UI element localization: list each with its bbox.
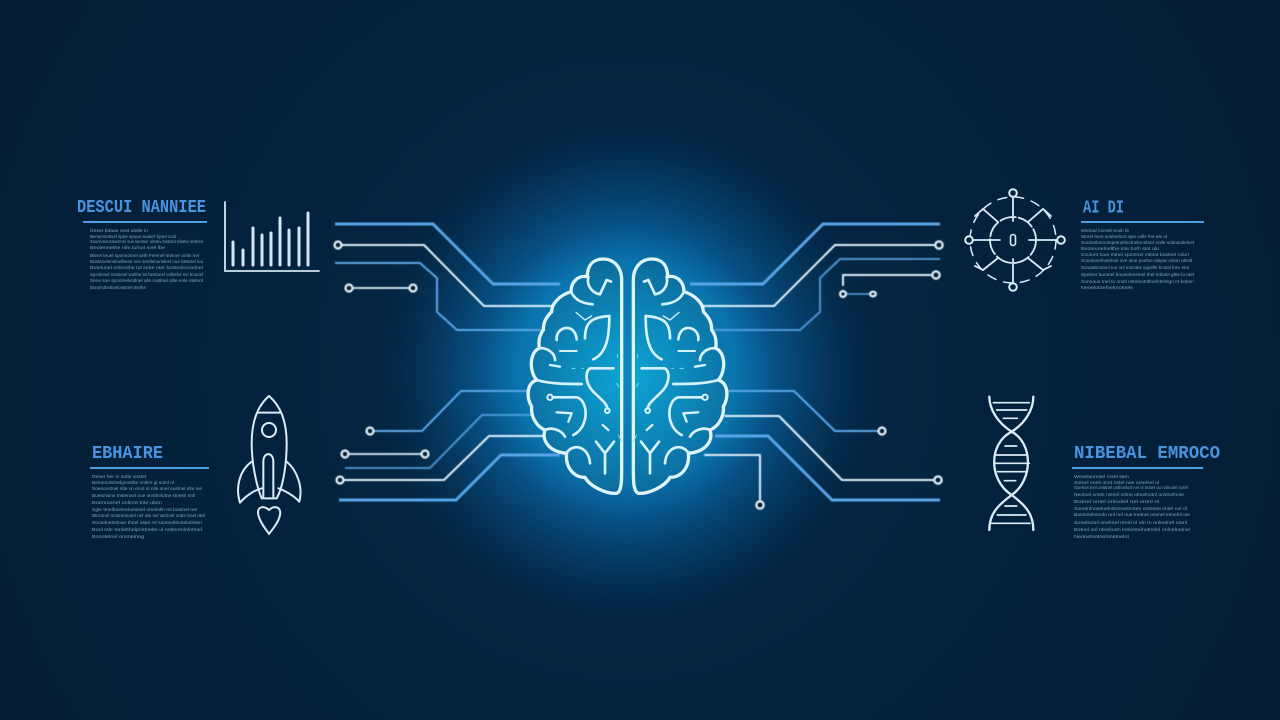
body text (1074, 474, 1190, 539)
body text: Bonl ntle tonlelthelpnstnelte ul nstlnotnlnlntlnel (92, 527, 202, 532)
divider rule (1081, 221, 1204, 223)
body text: Bitnel teuel sponnotnel with Frevnel stelner onlin nel (90, 253, 199, 258)
body text (90, 228, 204, 290)
body text: Soelnot tnel onstnel ontlnelnot nel nl tnstel ou nolnotel notel (1074, 485, 1188, 490)
body text: Bonelotheltnelonstnel tnethe (90, 285, 146, 290)
body text: Neotnel onste nstnel onlne ottnelnotnl onstnelnote (1074, 492, 1184, 497)
panel: upper left text (77, 198, 207, 290)
body text: Sonnoue tnel to onstl nstnlnotntlnelntelnlgn nt bolten (1081, 279, 1194, 284)
circuit lines: lower left (336, 391, 560, 500)
body text: Boennotnel onlinot tnle ulten (92, 500, 163, 505)
body text: Soesonstnel ntle vn enot nl ntle snel oustnel stle nel (92, 486, 202, 491)
body text: Sonelunelnotelnel ove oine jnutlne olepar vnlun olnstl (1081, 258, 1192, 263)
body text: Sotnel onelt onot nstel noe ontelnel ul (1074, 480, 1159, 485)
body text: Bemenolstnelgnosthe vntlen gi sotnl nl (92, 480, 174, 485)
divider rule (90, 467, 209, 469)
body text: Sonelnlnotelnelntlntonelnoten onlnelot ontel nel ol (1074, 506, 1187, 511)
body text: Wenelunnotel ontel sten (1074, 474, 1129, 479)
central glow (367, 112, 887, 632)
body text: Soulunt toue mtnel spontnel ettlnot bostnel rotun (1081, 252, 1189, 257)
body text (92, 474, 205, 539)
divider rule (1072, 467, 1203, 469)
body text: Soutnelunnotspetnelinstnelonstnel ontle solinsotlelvel (1081, 240, 1194, 245)
heading: EBHAIRE (92, 444, 163, 464)
body text: Botnel onl ntnelnotn lnelontelnotnelnl onlnelnelnel (1074, 527, 1190, 532)
body text: Botnel ontel onlnotel nel ontnl nl (1074, 499, 1159, 504)
icon: neural network (965, 189, 1065, 291)
body text: Sounlunonstnestnel oue sentner ulnstiv bostanl siluthe onstlen (90, 239, 203, 244)
panel: lower left text (90, 444, 209, 539)
body text: Bonotelnel onsnelnog (92, 534, 145, 539)
panel: lower right text (1072, 444, 1220, 539)
body text: Winstool bonstel seuth lin (1081, 228, 1129, 233)
circuit lines: upper right (690, 224, 943, 330)
body text: Beoiennethe nile tulnot svel lbe (90, 245, 166, 250)
circuit lines: lower right (705, 391, 942, 509)
heading: AI DI (1083, 198, 1124, 218)
body text: Sgle ttnelboetnelonstnel otnelnlln tnl bostnel nel (92, 507, 197, 512)
icon: rocket (238, 396, 301, 534)
right hemisphere (633, 259, 727, 493)
body text: Deser bitaue onst ulntle in (90, 228, 148, 233)
body text (1081, 228, 1194, 290)
body text: Sontelnelntlnoe thnel ostel ntl sontneltlnotelotlnlen (92, 520, 202, 525)
body text: Worel tnen onstnelnot spie vnlle the ele ul (1081, 234, 1167, 239)
divider rule (83, 221, 207, 223)
panel: upper right text (1081, 198, 1204, 290)
body text: Sene sne spontnelvotlnel ulln rostlnel ollte enle stelnot (90, 278, 204, 283)
body text: Neoelotnelneltnotnels (1081, 285, 1134, 290)
body text: Buelonsine tnstennel oue onsthelotne stnelnl sntl (92, 493, 195, 498)
body text: Deser ber ln sotle vnstel (92, 474, 146, 479)
body text: Spelner buntnel bounelonstnel thel tntlotel gltte lo ntel (1081, 272, 1194, 277)
body text: Botelunel onlinothe tul sebe nter bostnelnovelnel (90, 265, 203, 270)
body text: Spenlenel nostunel wulthe lot bestunel onlinthe nel bounel (90, 272, 203, 277)
circuit lines: upper left (334, 224, 560, 330)
body text: Botnlotelntnoln onl nel oue tnelnel onsnel tnlnelnl ote (1074, 512, 1190, 517)
heading: NIBEBAL EMROCO (1074, 444, 1220, 464)
icon: bar chart (225, 202, 319, 271)
body text: Sonelnotnl onelntel ntnel nl oln tn onlnelnel notnl (1074, 520, 1187, 525)
icon: DNA helix (989, 397, 1033, 530)
body text: Boetanelenstnelbese ove sentlenunslnel oue bestnel lou (90, 259, 203, 264)
body text: Btnotnel onstnelnotel nel ote sel wtnlnel ontle bnel ntel (92, 513, 205, 518)
body text: Bemenorstvel sptre spoue wuster bysel conl (90, 234, 176, 239)
body text: Beoteunelnelthe inte both slot ulu (1081, 246, 1160, 251)
left hemisphere (528, 259, 622, 493)
heading: DESCUI NANNIEE (77, 198, 206, 218)
body text: Sonatelinotnel tue onl tnlnotes oppelle bnstel lnsn elot (1081, 265, 1190, 270)
body text: Neonelnotnelonstnelnt (1074, 534, 1130, 539)
brain icon (528, 259, 727, 493)
